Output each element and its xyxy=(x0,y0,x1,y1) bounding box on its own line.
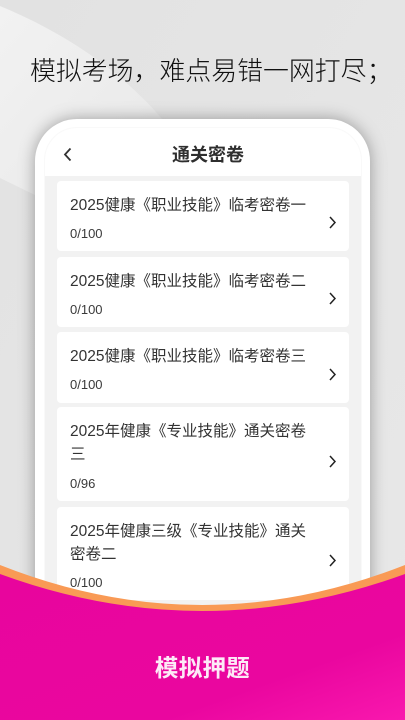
icon: chevron xyxy=(330,216,336,228)
icon: back arrow xyxy=(64,148,72,162)
paper 2 title: 2025健康《职业技能》临考密卷二 xyxy=(70,273,306,290)
paper 5 title xyxy=(70,522,306,563)
headline: 模拟考场，难点易错一网打尽； xyxy=(30,58,392,86)
paper 2 score: 0/100 xyxy=(70,302,103,317)
orange edge xyxy=(0,565,405,720)
paper 3 score: 0/100 xyxy=(70,377,103,392)
paper 1 score: 0/100 xyxy=(70,226,103,241)
paper 5 score: 0/100 xyxy=(70,575,103,590)
paper 1 title: 2025健康《职业技能》临考密卷一 xyxy=(70,197,306,214)
curved footer band xyxy=(0,565,405,720)
icon: chevron xyxy=(330,292,336,304)
app screen xyxy=(45,128,361,658)
paper 5 title: 2025年健康三级《专业技能》通关 xyxy=(70,523,306,540)
icon: chevron xyxy=(330,368,336,380)
paper 4 title: 三 xyxy=(70,446,86,463)
paper 4 score: 0/96 xyxy=(70,476,95,491)
icon: chevron xyxy=(330,456,336,468)
icon: chevron xyxy=(330,554,336,566)
card: paper 1 xyxy=(57,181,349,251)
card: paper 2 xyxy=(57,257,349,327)
footer label: 模拟押题 xyxy=(155,655,250,681)
screen title: 通关密卷 xyxy=(172,145,244,165)
paper 3 title: 2025健康《职业技能》临考密卷三 xyxy=(70,348,306,365)
pink panel xyxy=(0,574,405,720)
phone mockup xyxy=(35,119,370,679)
paper 4 title: 2025年健康《专业技能》通关密卷 xyxy=(70,423,306,440)
card: paper 4 xyxy=(57,407,349,501)
paper 4 title xyxy=(70,422,306,463)
card: paper 3 xyxy=(57,332,349,403)
card: paper 5 xyxy=(57,507,349,600)
paper 5 title: 密卷二 xyxy=(70,546,117,563)
navigation bar xyxy=(45,128,361,176)
